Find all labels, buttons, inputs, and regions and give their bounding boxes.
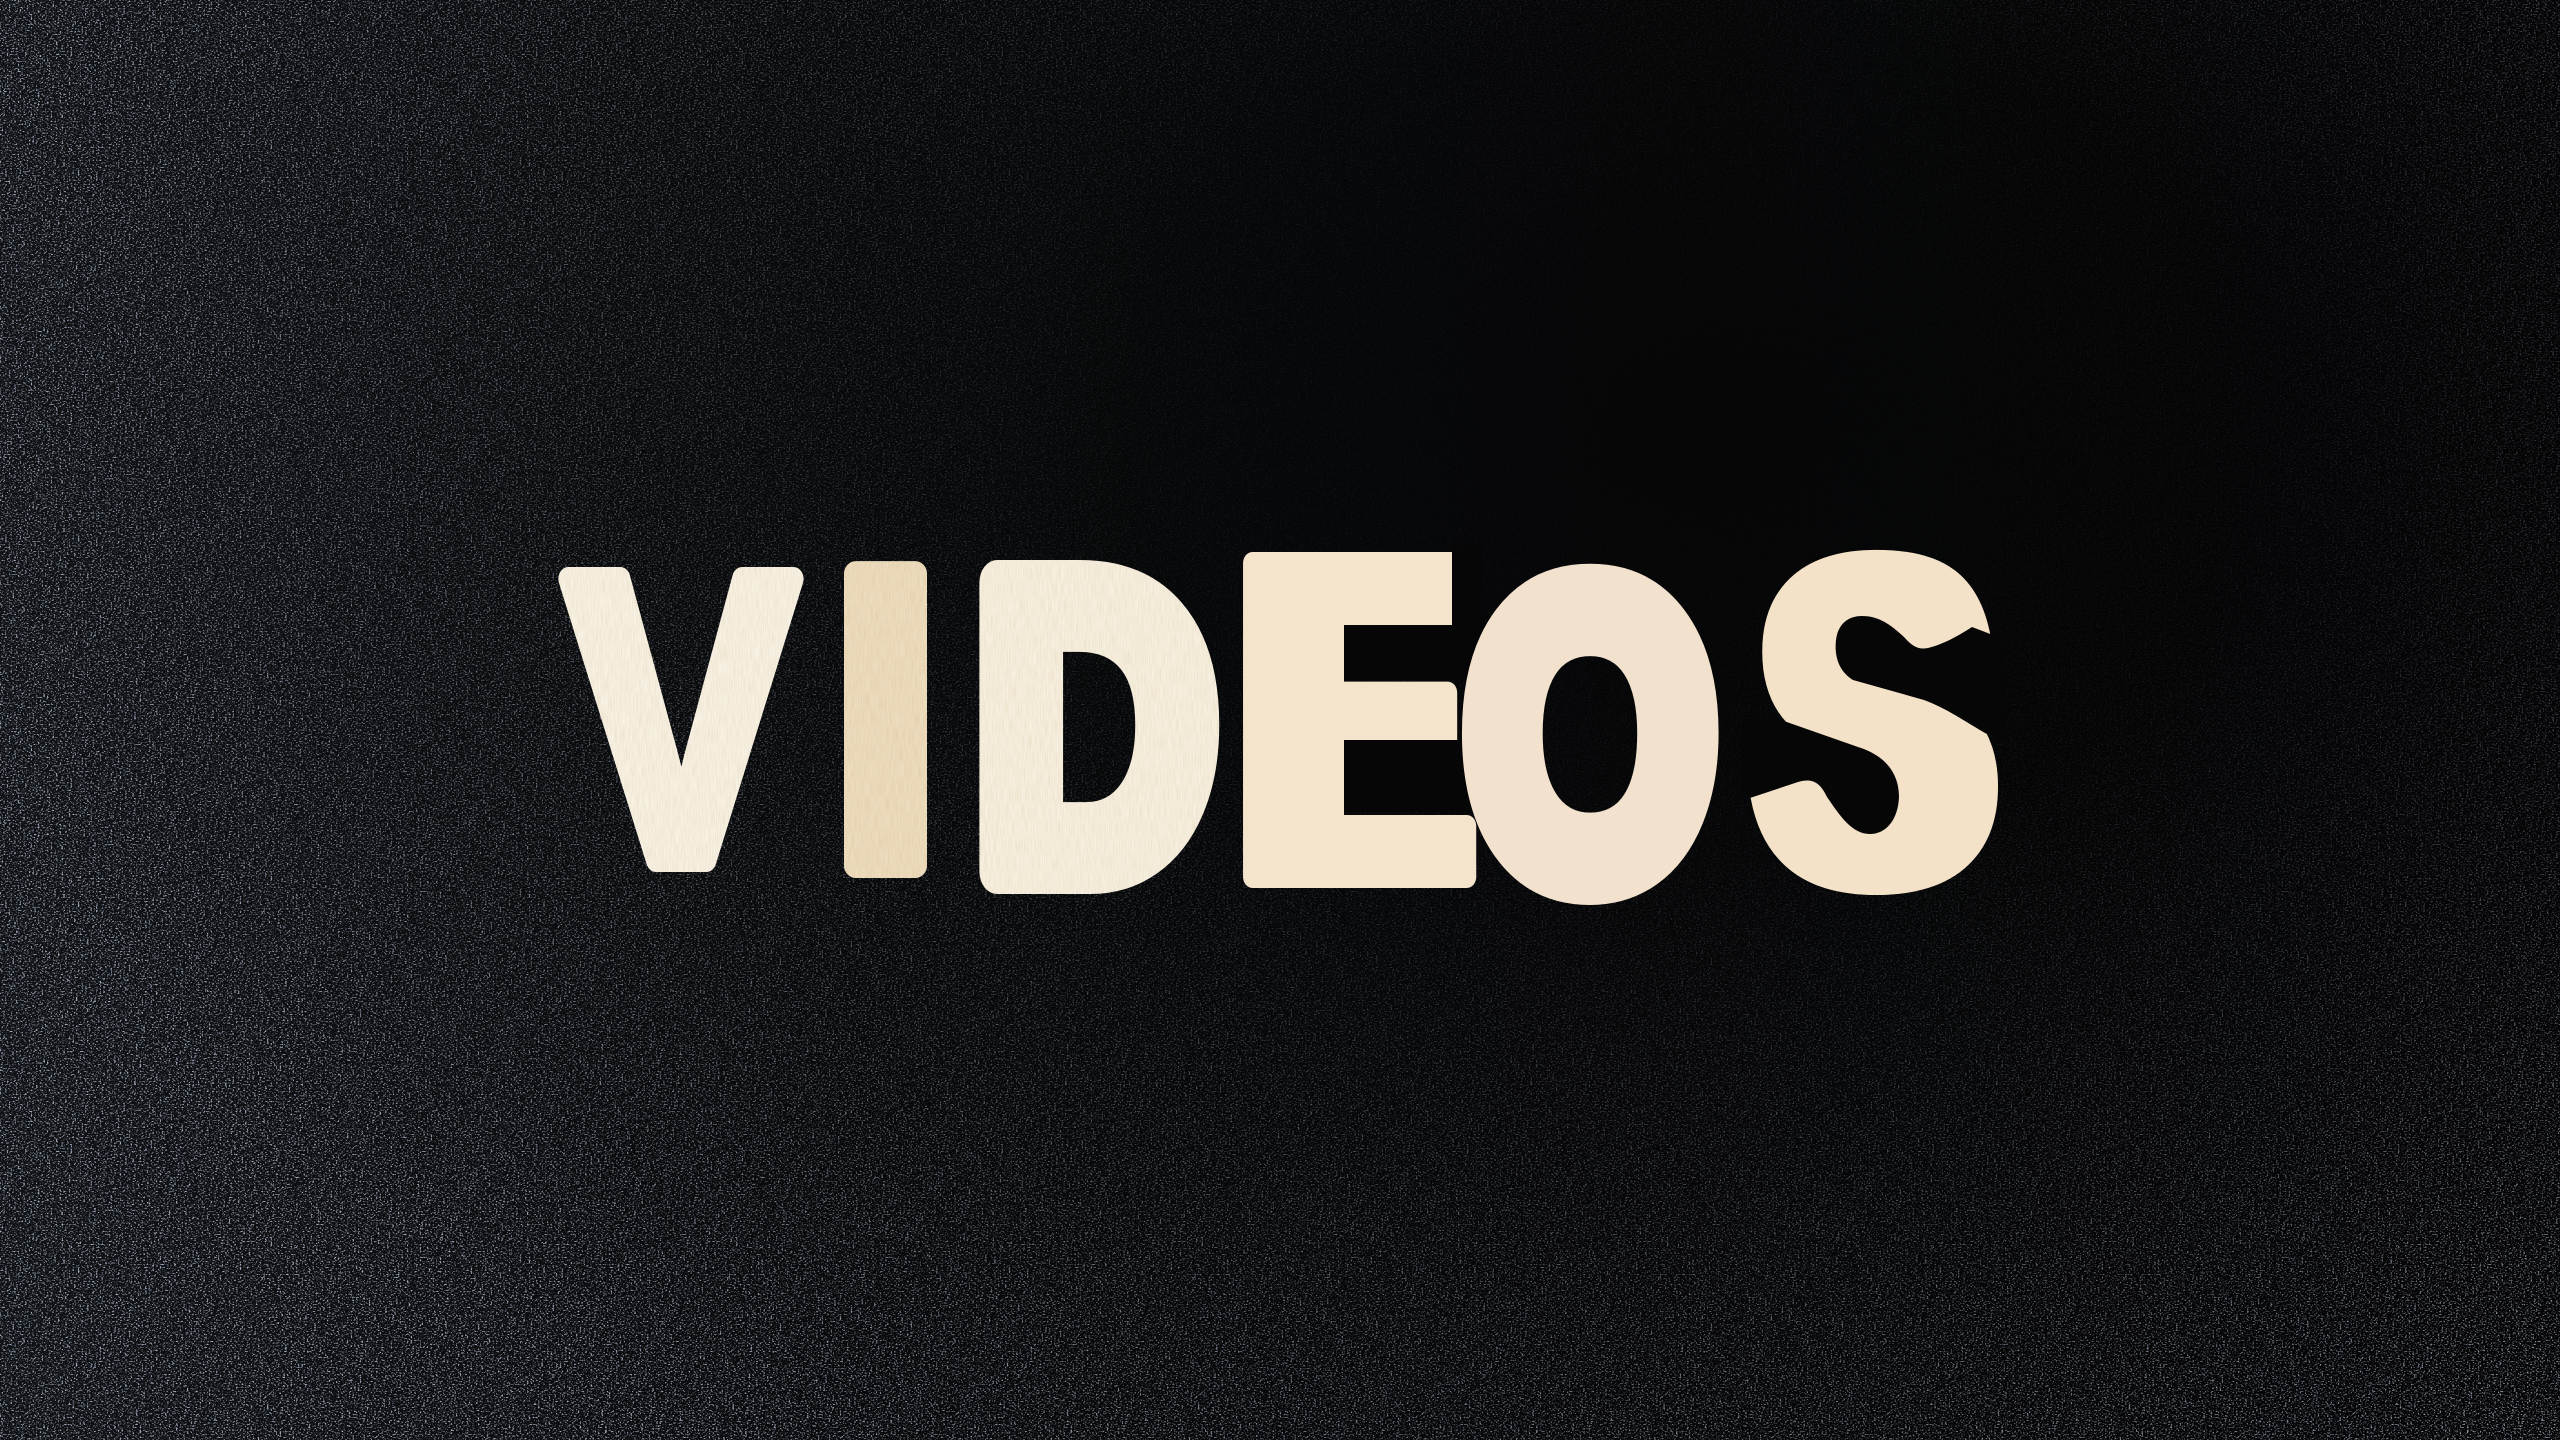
letter E with widened stem and opened slots: E (1227, 465, 1482, 974)
letter O: O (1466, 500, 1715, 967)
letter D: D (975, 492, 1215, 961)
word: VIDEOS (566, 465, 2006, 974)
letter S with opened apertures: S (1754, 476, 1998, 967)
letter V: V (566, 491, 798, 948)
letter I: I (829, 482, 942, 956)
